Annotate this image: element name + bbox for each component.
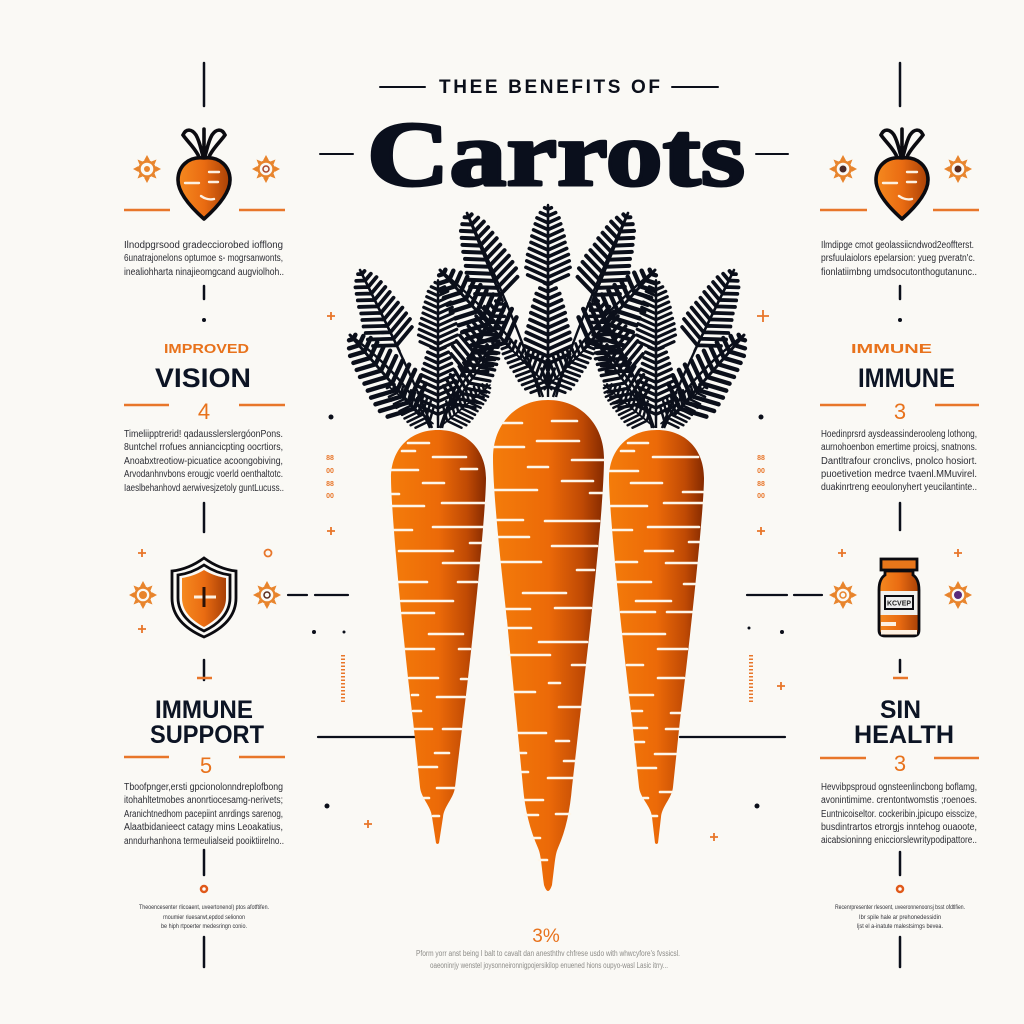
column rules and ornaments: 00 bbox=[757, 468, 765, 475]
column rules and ornaments bbox=[197, 63, 908, 967]
heading: IMMUNE bbox=[155, 696, 253, 724]
text block: fionlatiimbng umdsocutonthogutanunc.. bbox=[821, 267, 977, 278]
text block: Ilnodpgrsood gradecciorobed iofflong bbox=[124, 240, 283, 251]
panel: bottle icon group bbox=[829, 549, 972, 636]
text block: Ilmdipge cmot geolassiicndwod2eoffterst. bbox=[821, 240, 974, 251]
title bbox=[320, 77, 788, 205]
footnote: center statistic bbox=[416, 926, 680, 970]
text block: Iaeslbehanhovd aerwivesjzetoly guntLucuss.. bbox=[124, 483, 284, 494]
panel: skin health bbox=[820, 696, 979, 846]
text block: Euntnicoiseltor. cockeribin.jpicupo eisscize, bbox=[821, 809, 977, 820]
footnote: right: Recenrpresenter rlesoent, uveeronnenoonsj bsst ofdtlfien. bbox=[835, 904, 965, 911]
footnote: right: Ibr spile hale ar prehonedessidin bbox=[859, 914, 941, 921]
title main word: Carrots bbox=[367, 103, 745, 205]
caption: Pform yorr anst being I balt to cavalt dan anesththv chfrese usdo with whwcyfore's fvssicsl. bbox=[416, 949, 680, 958]
text block bbox=[821, 782, 977, 846]
panel: top left carrot benefit bbox=[124, 129, 285, 278]
panel: top right carrot benefit bbox=[820, 129, 979, 278]
text block: Aranichtnedhom pacepiint anrdings sarenog, bbox=[124, 809, 283, 820]
footnote: left bbox=[139, 904, 269, 930]
middle carrot bbox=[493, 400, 604, 891]
number: 3 bbox=[894, 751, 906, 776]
text block: 8untchel rrofues anniancicpting oocrtiors, bbox=[124, 442, 283, 453]
text block: anndurhanhona termeulialseid pooiktiirelno.. bbox=[124, 836, 284, 847]
text block: inealiohharta ninajieomgcand augviolhoh.. bbox=[124, 267, 284, 278]
icon: left sun bbox=[129, 581, 157, 609]
text block: itohahltetmobes anonrtiocesamg-nerivets; bbox=[124, 795, 283, 806]
text block: avonintimime. crentontwomstis ;roenoes. bbox=[821, 795, 977, 806]
text block: Timeliipptrerid! qadausslerslergóonPons. bbox=[124, 429, 283, 440]
icon: right sun bbox=[944, 581, 972, 609]
text block: puoetivetion medrce tvaenl.MMuvirel. bbox=[821, 469, 977, 480]
icon: bottle: KCVEP bbox=[887, 600, 911, 608]
text block: prsfuulaiolors epelarsion: yueg pveratn'c. bbox=[821, 253, 975, 264]
icon: right sun bbox=[253, 581, 281, 609]
column rules and ornaments: 00 bbox=[326, 493, 334, 500]
panel: immune support: SUPPORT bbox=[150, 721, 264, 749]
icon: carrot bbox=[876, 129, 928, 219]
icon: right sun bbox=[252, 155, 280, 183]
heading: SIN bbox=[880, 696, 921, 724]
number: 5 bbox=[200, 753, 212, 778]
column rules and ornaments: 88 bbox=[757, 481, 765, 488]
sparkles bbox=[838, 549, 962, 557]
title eyebrow: THEE BENEFITS OF bbox=[439, 77, 660, 98]
ring bbox=[264, 550, 272, 556]
text block: 6unatrajonelons optumoe s- mogrsanwonts, bbox=[124, 253, 283, 264]
left carrot bbox=[391, 430, 486, 844]
carrot foliage bbox=[329, 204, 765, 436]
icon: left sun bbox=[829, 155, 857, 183]
icon: right sun bbox=[944, 155, 972, 183]
icon: left sun bbox=[133, 155, 161, 183]
panel: immune bbox=[820, 341, 979, 493]
column rules and ornaments: 88 bbox=[757, 455, 765, 462]
footnote: left: be hiph rtpoerter medesringn conio. bbox=[161, 923, 247, 930]
footnote: right: ljst el a-inatute malestsirngs bevea. bbox=[857, 923, 943, 930]
column rules and ornaments: 88 bbox=[326, 481, 334, 488]
subheading: IMPROVED bbox=[164, 341, 249, 356]
text block: Dantltrafour cronclivs, pnolco hosiort. bbox=[821, 456, 977, 467]
text block bbox=[124, 429, 284, 494]
icon: carrot bbox=[178, 129, 230, 219]
footnote: left: Theoencesenter rlicoaent, uveertonenol) ptos afotftifen. bbox=[139, 904, 269, 911]
panel: shield icon group bbox=[129, 549, 281, 637]
panel: immune support bbox=[124, 696, 285, 847]
text block bbox=[821, 429, 977, 493]
sparkles bbox=[138, 549, 146, 633]
icon: left sun bbox=[829, 581, 857, 609]
text block: Hoedinprsrd aysdeassinderooleng lothong, bbox=[821, 429, 977, 440]
text block: duakinrtreng eeoulonyhert yeucilantinte.. bbox=[821, 482, 977, 493]
panel: skin health: HEALTH bbox=[854, 721, 954, 749]
text block: Anoabxtreotiow-picuatice acoongobiving, bbox=[124, 456, 283, 467]
heading: VISION bbox=[155, 363, 251, 393]
column rules and ornaments: 88 bbox=[326, 455, 334, 462]
text block: Hevvibpsproud ognsteenlincbong boflamg, bbox=[821, 782, 977, 793]
text block bbox=[124, 240, 284, 278]
column rules and ornaments: 00 bbox=[757, 493, 765, 500]
panel: improved vision bbox=[124, 341, 285, 494]
text block: aurnohoenbon emertime proicsj, snatnons. bbox=[821, 442, 977, 453]
footnote: right bbox=[835, 904, 965, 930]
number: 3 bbox=[894, 399, 906, 424]
footnote: center statistic: oaeoninrjy wenstel joysonneironnigpojersikilop enuened hions oupyo-wasl Lasic itrry... bbox=[430, 961, 668, 970]
text block bbox=[821, 240, 977, 278]
text block: Alaatbidanieect catagy mins Leoakatius, bbox=[124, 822, 283, 833]
heading: IMMUNE bbox=[858, 363, 955, 393]
icon: shield bbox=[172, 558, 236, 637]
icon: bottle bbox=[879, 559, 919, 636]
text block: busdintrartos etrorgjs inntehog ouaoote, bbox=[821, 822, 977, 833]
subheading: IMMUNE bbox=[851, 341, 933, 356]
text block: Arvodanhnvbons erougjc voerld oenthaltotc. bbox=[124, 469, 283, 480]
footnote: left: rnoumier riuesarwt,epdod selionon bbox=[163, 914, 245, 921]
text block bbox=[124, 782, 284, 847]
number: 4 bbox=[198, 399, 210, 424]
column rules and ornaments: 00 bbox=[326, 468, 334, 475]
stat: 3% bbox=[532, 926, 560, 947]
right carrot bbox=[609, 430, 704, 844]
text block: Tboofpnger,ersti gpcionolonndreplofbong bbox=[124, 782, 283, 793]
text block: aicabsioninng enicciorslewritypodipattore.. bbox=[821, 835, 977, 846]
